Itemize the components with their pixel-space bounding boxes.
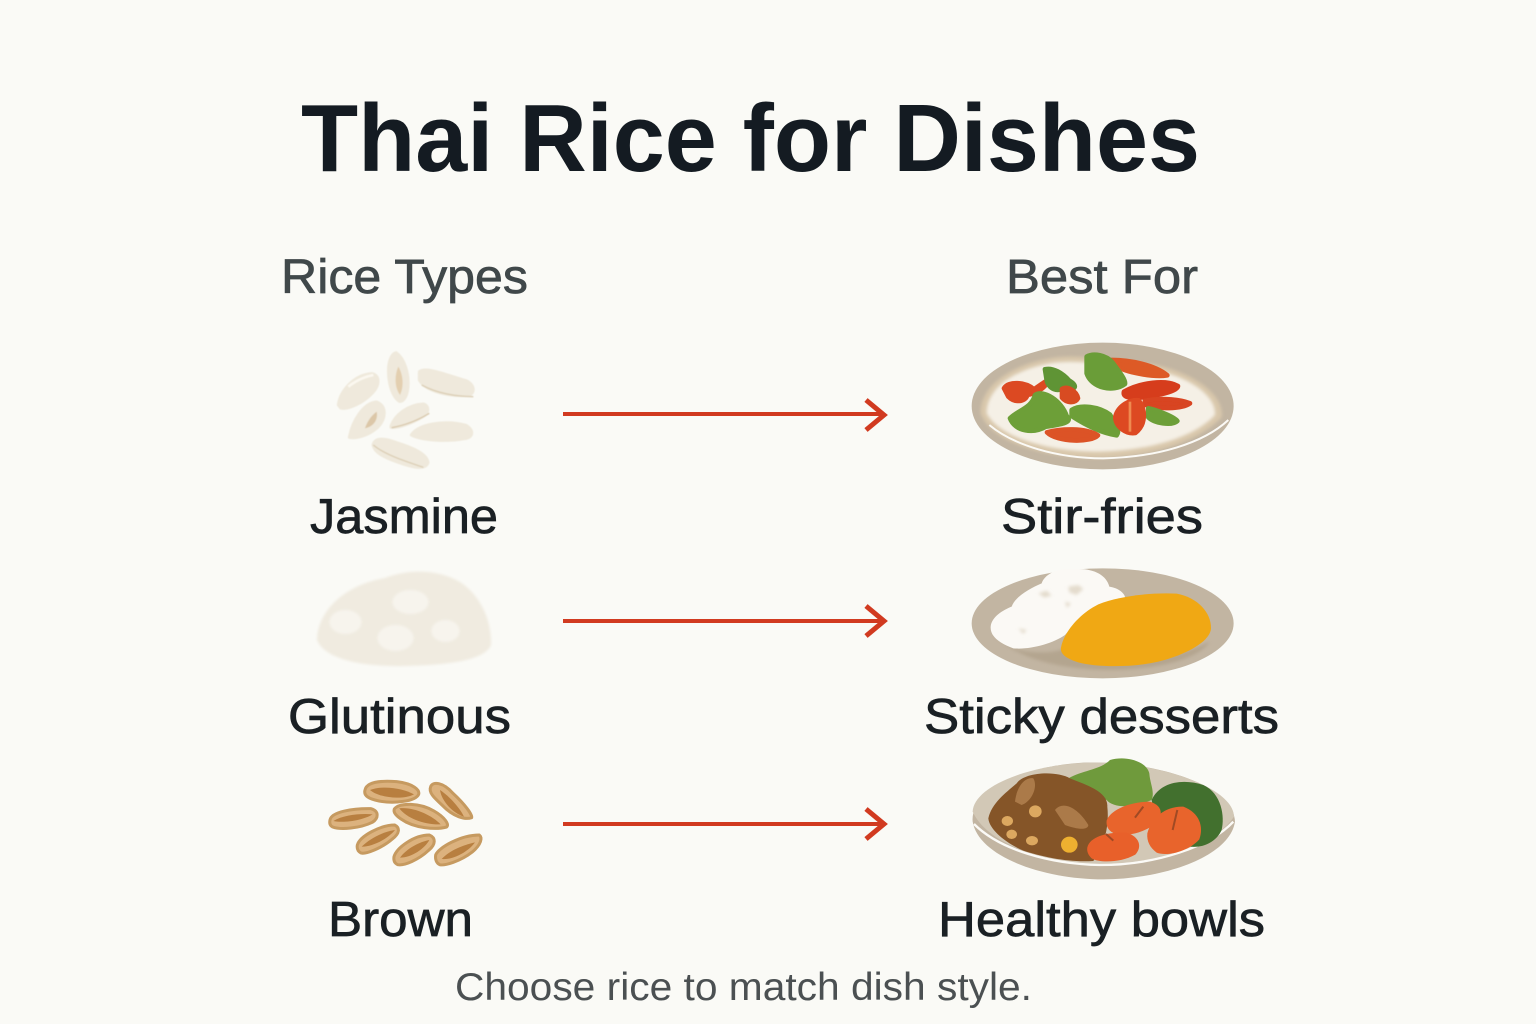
plate	[972, 343, 1234, 469]
heading: best for: Best For	[1006, 251, 1198, 304]
label: stir-fries: Stir-fries	[1001, 490, 1203, 544]
arrow: jasmine to stir-fries	[563, 400, 884, 430]
icon: stir-fry plate	[972, 343, 1234, 469]
sticky rice	[991, 569, 1125, 649]
arrow: brown to healthy bowls	[563, 809, 884, 839]
icon: healthy bowl	[973, 758, 1235, 879]
icon: glutinous rice mound	[317, 572, 491, 666]
arrow: glutinous to sticky desserts	[563, 606, 884, 636]
heading: rice types: Rice Types	[281, 251, 528, 304]
label: glutinous: Glutinous	[288, 690, 511, 744]
plate shadow	[993, 635, 1210, 670]
plate	[973, 762, 1235, 879]
label: brown: Brown	[328, 893, 473, 947]
plate	[972, 568, 1234, 678]
carrots	[1107, 802, 1161, 835]
label: jasmine: Jasmine	[310, 490, 498, 544]
icon: jasmine rice grains	[338, 353, 473, 467]
stir-fry vegetables	[1004, 355, 1190, 440]
title: Thai Rice for Dishes	[301, 85, 1200, 192]
label: healthy bowls: Healthy bowls	[938, 893, 1265, 947]
label: sticky desserts: Sticky desserts	[924, 690, 1279, 744]
icon: brown rice grains	[330, 781, 481, 865]
footer note: Choose rice to match dish style.	[455, 966, 1032, 1009]
icon: mango sticky rice plate	[972, 568, 1234, 678]
lentil stew	[988, 773, 1108, 861]
mango	[1061, 593, 1211, 666]
green vegetables	[1068, 758, 1153, 806]
